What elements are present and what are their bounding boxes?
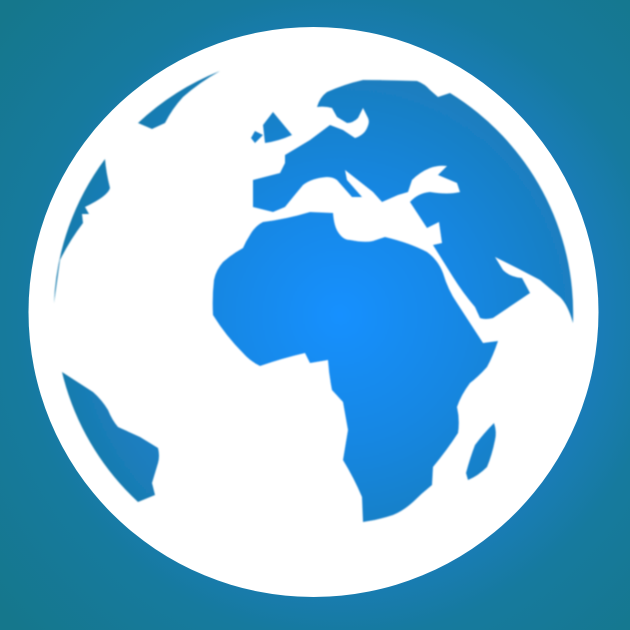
continent: Eurasia (253, 80, 573, 323)
island: Ireland (251, 131, 263, 143)
landmass: Greenland (138, 71, 220, 129)
landmass: North America (54, 159, 110, 303)
continents (54, 71, 573, 522)
landmass: South America (62, 372, 159, 502)
continent: Africa (213, 212, 498, 522)
island: Madagascar (466, 423, 496, 480)
island: Great Britain (263, 112, 292, 143)
